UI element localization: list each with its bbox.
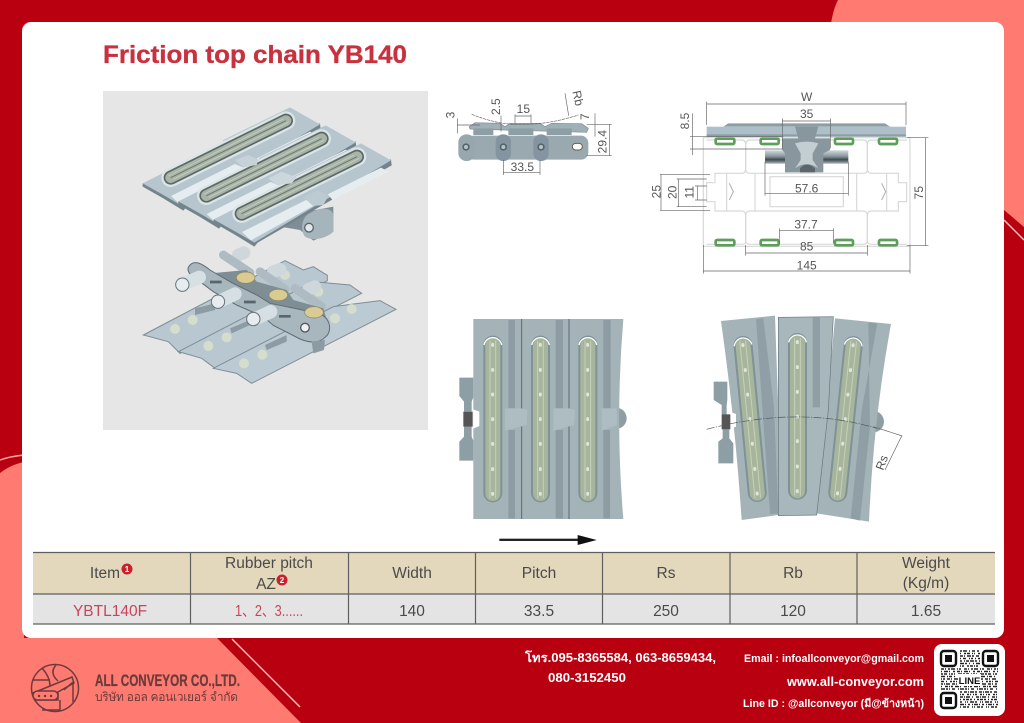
direction arrow (499, 535, 597, 545)
header labels (90, 555, 951, 593)
contact email web line (743, 653, 924, 710)
header labels: Pitch (522, 565, 556, 582)
Rs dimension (873, 427, 902, 472)
data values: 140 (399, 603, 425, 620)
header labels: Rubber pitch (225, 555, 313, 572)
data row (33, 594, 995, 624)
data values: 120 (780, 603, 806, 620)
header labels: Rb (783, 565, 803, 582)
centre hub and pin (765, 127, 848, 172)
left pale stripe (0, 455, 24, 460)
curved plates (707, 316, 891, 522)
end pin (459, 378, 473, 461)
contact phone numbers (524, 650, 716, 685)
header labels: Weight (902, 555, 951, 572)
3D chain drawing (143, 107, 396, 383)
straight plates (473, 319, 623, 519)
QR code (934, 644, 1005, 716)
data values: 1、2、3...... (235, 603, 303, 620)
data values (73, 603, 941, 620)
section dimensions: 85 (800, 240, 814, 254)
top plate section (707, 123, 906, 137)
header labels: Width (392, 565, 432, 582)
company name: ALL CONVEYOR CO.,LTD. (95, 671, 240, 690)
section dimensions: 37.7 (794, 217, 818, 231)
section dimensions: 25 (649, 185, 663, 198)
section dimensions: W (801, 90, 813, 104)
side view diagram (444, 89, 612, 175)
plate tabs (235, 155, 258, 167)
section dimensions: 57.6 (795, 181, 819, 195)
data values: YBTL140F (73, 603, 147, 620)
guide clips (716, 139, 897, 245)
header labels: (Kg/m) (903, 575, 949, 592)
header labels: Rs (657, 565, 676, 582)
header labels: AZ (256, 576, 276, 593)
hinge bump (605, 408, 627, 429)
contact phone numbers: 080-3152450 (548, 671, 626, 685)
section dimensions (649, 90, 928, 274)
data values: 33.5 (524, 603, 554, 620)
contact email web line: Line ID : @allconveyor (มี@ข้างหน้า) (743, 697, 924, 710)
side view dimensions: 7 (578, 113, 592, 120)
side view dimensions: Rb (569, 89, 586, 107)
top view straight chain (459, 319, 627, 519)
panel: exploded 3D chain photo (103, 91, 428, 430)
contact email web line: Email : infoallconveyor@gmail.com (744, 653, 924, 665)
company logo (32, 664, 240, 712)
section dimensions: 20 (665, 185, 679, 199)
curved end pin (714, 382, 733, 463)
back pin stubs (238, 253, 315, 289)
side view dimensions: 2.5 (489, 98, 503, 115)
side view dimensions: 33.5 (511, 160, 534, 174)
top right pink shape (830, 0, 1024, 227)
right pale stripe (1004, 220, 1024, 240)
specification table (33, 552, 995, 624)
top view curved chain (707, 316, 902, 522)
QR LINE label: LINE (959, 676, 980, 687)
side view dimensions: 29.4 (595, 130, 609, 153)
side view dimensions: 3 (444, 111, 458, 118)
title: Friction top chain YB140 (103, 41, 407, 69)
header labels: 2 (280, 576, 285, 585)
section dimensions: 145 (797, 258, 817, 272)
header row (33, 552, 995, 594)
rubber dots (175, 275, 352, 363)
bottom pale stripe (232, 639, 300, 707)
brass bolts (236, 272, 255, 283)
chain links and pins (176, 253, 330, 353)
side view plates (469, 123, 588, 132)
front link plate (188, 263, 330, 342)
header labels: 1 (125, 565, 130, 574)
side view dimensions (444, 89, 612, 175)
contact email web line: www.all-conveyor.com (786, 675, 924, 689)
QR data modules (941, 651, 998, 707)
side view dimensions: 15 (517, 102, 530, 116)
contact phone numbers: โทร.095-8365584, 063-8659434, (524, 650, 716, 665)
Rs dimension: Rs (873, 453, 891, 472)
lower base plates (143, 261, 396, 383)
company name thai: บริษัท ออล คอนเวเยอร์ จำกัด (95, 690, 238, 704)
QR finder patterns (941, 651, 998, 708)
header labels: Item (90, 565, 120, 582)
upper friction plates (143, 107, 392, 247)
webs between links (210, 270, 327, 320)
data values: 1.65 (911, 603, 941, 620)
front section diagram (649, 90, 928, 274)
data values: 250 (653, 603, 679, 620)
aluminium frame (703, 138, 910, 246)
back link plates (223, 255, 322, 307)
section dimensions: 8.5 (678, 112, 692, 129)
section dimensions: 11 (682, 186, 696, 199)
section dimensions: 35 (800, 107, 814, 121)
bottom left pink shape (0, 462, 301, 723)
logo icon (32, 664, 78, 712)
side view links (458, 128, 588, 161)
curved hinge bump (863, 411, 884, 432)
section dimensions: 75 (912, 186, 926, 199)
hub below upper plates (280, 207, 333, 241)
front pins (183, 277, 271, 319)
